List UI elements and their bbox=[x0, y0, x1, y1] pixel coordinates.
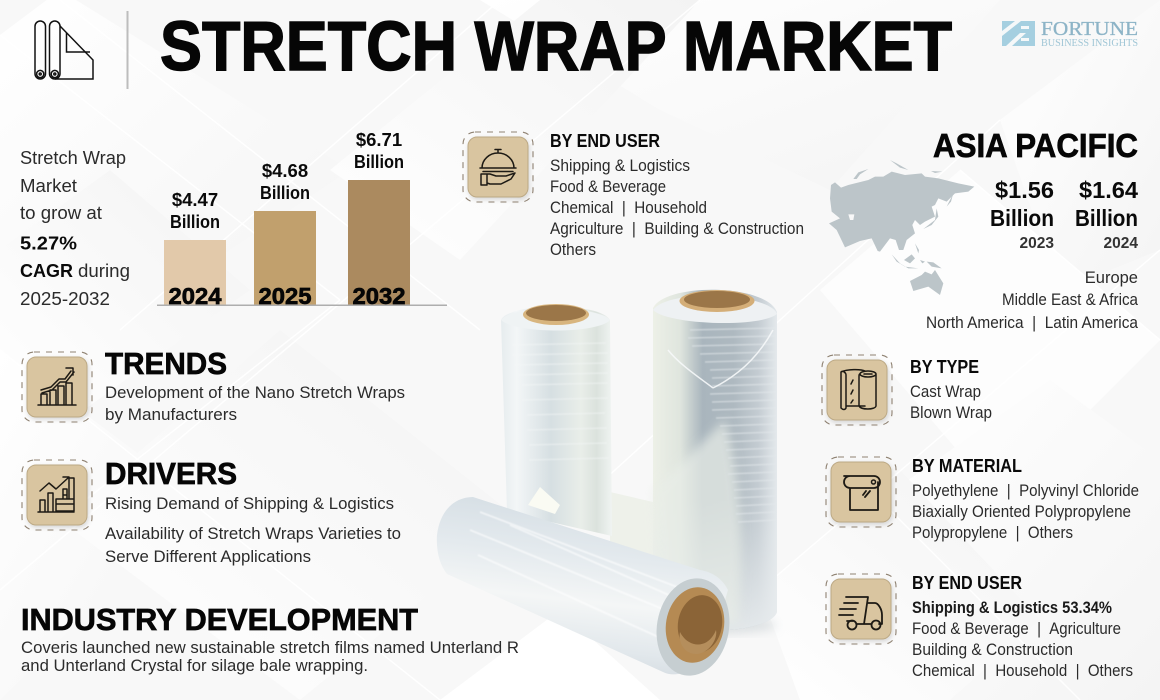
map: Asia Pacific bbox=[829, 160, 974, 295]
other regions: Middle East & Africa bbox=[1002, 291, 1139, 309]
trends text: Development of the Nano Stretch Wraps bbox=[105, 384, 405, 402]
region: Asia Pacific values: $1.64 bbox=[1079, 177, 1138, 203]
lying roll bbox=[437, 497, 737, 682]
industry development bbox=[21, 602, 519, 675]
region: Asia Pacific values: ASIA PACIFIC bbox=[933, 127, 1138, 164]
bar 2032: $6.71 bbox=[356, 129, 402, 150]
segment: by end user (top): Agriculture | Building & Construction bbox=[550, 220, 804, 238]
left standing roll bbox=[501, 304, 612, 536]
other regions bbox=[926, 269, 1139, 332]
drivers text: Rising Demand of Shipping & Logistics bbox=[105, 495, 394, 513]
region: Asia Pacific values: 2024 bbox=[1104, 235, 1138, 252]
segment: by end user (bottom): Food & Beverage | Agriculture bbox=[912, 620, 1121, 638]
segment: by type: Cast Wrap bbox=[910, 383, 981, 401]
bar 2024 bbox=[164, 189, 226, 309]
segment: by end user (bottom): BY END USER bbox=[912, 573, 1022, 593]
CAGR text block: 2025-2032 bbox=[20, 288, 110, 309]
logo: Fortune Business Insights: FORTUNE bbox=[1041, 18, 1138, 40]
CAGR text block: 5.27% bbox=[20, 232, 77, 254]
bar 2024: 2024 bbox=[168, 283, 222, 309]
segment: by end user (bottom): Building & Construction bbox=[912, 641, 1073, 659]
icon: trends bbox=[22, 352, 92, 422]
industry development: Coveris launched new sustainable stretch films named Unterland R bbox=[21, 639, 519, 657]
segment: by type: BY TYPE bbox=[910, 357, 979, 377]
region: Asia Pacific values: Billion bbox=[1075, 205, 1138, 231]
icon: by material bbox=[826, 457, 896, 527]
logo: Fortune Business Insights bbox=[1002, 18, 1138, 49]
CAGR text block: during bbox=[78, 260, 130, 281]
other regions: Europe bbox=[1085, 269, 1138, 287]
bar chart: market size bbox=[157, 129, 447, 309]
other regions: North America | Latin America bbox=[926, 314, 1139, 332]
bar 2024: $4.47 bbox=[172, 189, 218, 210]
CAGR text block bbox=[20, 147, 130, 309]
drivers text: DRIVERS bbox=[105, 456, 237, 491]
industry development: and Unterland Crystal for silage bale wrapping. bbox=[21, 657, 368, 675]
segment: by end user (bottom) bbox=[912, 573, 1133, 680]
header divider bbox=[126, 11, 128, 89]
segment: by end user (top): Others bbox=[550, 241, 596, 259]
segment: by material: Polyethylene | Polyvinyl Chloride bbox=[912, 482, 1139, 500]
trends text bbox=[105, 346, 405, 424]
bar 2032: Billion bbox=[354, 151, 404, 172]
segment: by type bbox=[910, 357, 992, 422]
segment: by end user (top): Food & Beverage bbox=[550, 178, 666, 196]
segment: by end user (top): Chemical | Household bbox=[550, 199, 707, 217]
right standing roll bbox=[653, 290, 777, 634]
segment: by type: Blown Wrap bbox=[910, 404, 992, 422]
trends text: TRENDS bbox=[105, 346, 227, 381]
CAGR text block: to grow at bbox=[20, 202, 102, 223]
CAGR text block: CAGR bbox=[20, 260, 73, 281]
title: STRETCH WRAP MARKET bbox=[160, 7, 952, 85]
product photo: stretch wrap rolls bbox=[437, 290, 777, 682]
segment: by material bbox=[912, 456, 1139, 542]
segment: by end user (top) bbox=[550, 131, 804, 259]
bar 2032: 2032 bbox=[352, 283, 406, 309]
bar 2025: $4.68 bbox=[262, 160, 308, 181]
segment: by material: BY MATERIAL bbox=[912, 456, 1022, 476]
icon: end user cloche bbox=[463, 132, 533, 202]
bar 2032 bbox=[348, 129, 410, 309]
icon: by type bbox=[822, 355, 892, 425]
segment: by material: Polypropylene | Others bbox=[912, 524, 1073, 542]
segment: by end user (bottom): Chemical | Household | Others bbox=[912, 662, 1133, 680]
region: Asia Pacific values: Billion bbox=[990, 205, 1054, 231]
header icon: stretch wrap rolls bbox=[35, 21, 93, 79]
bar 2025: Billion bbox=[260, 182, 310, 203]
segment: by end user (top): Shipping & Logistics bbox=[550, 157, 690, 175]
icon: truck bbox=[826, 574, 896, 644]
region: Asia Pacific values bbox=[933, 127, 1138, 252]
segment: by end user (top): BY END USER bbox=[550, 131, 660, 151]
drivers text: Availability of Stretch Wraps Varieties to bbox=[105, 525, 401, 543]
bar 2025: 2025 bbox=[258, 283, 312, 309]
region: Asia Pacific values: $1.56 bbox=[995, 177, 1054, 203]
logo: Fortune Business Insights: BUSINESS INSIGHTS bbox=[1041, 38, 1138, 49]
bar 2024: Billion bbox=[170, 211, 220, 232]
bar 2025 bbox=[254, 160, 316, 309]
drivers text: Serve Different Applications bbox=[105, 548, 311, 566]
segment: by material: Biaxially Oriented Polypropylene bbox=[912, 503, 1131, 521]
icon: drivers bbox=[22, 460, 92, 530]
CAGR text block: Market bbox=[20, 175, 77, 196]
segment: by end user (bottom): Shipping & Logistics 53.34% bbox=[912, 599, 1112, 617]
trends text: by Manufacturers bbox=[105, 406, 237, 424]
region: Asia Pacific values: 2023 bbox=[1020, 235, 1054, 252]
rear film between rolls bbox=[610, 492, 670, 580]
industry development: INDUSTRY DEVELOPMENT bbox=[21, 602, 418, 637]
drivers text bbox=[105, 456, 401, 566]
CAGR text block: Stretch Wrap bbox=[20, 147, 126, 168]
